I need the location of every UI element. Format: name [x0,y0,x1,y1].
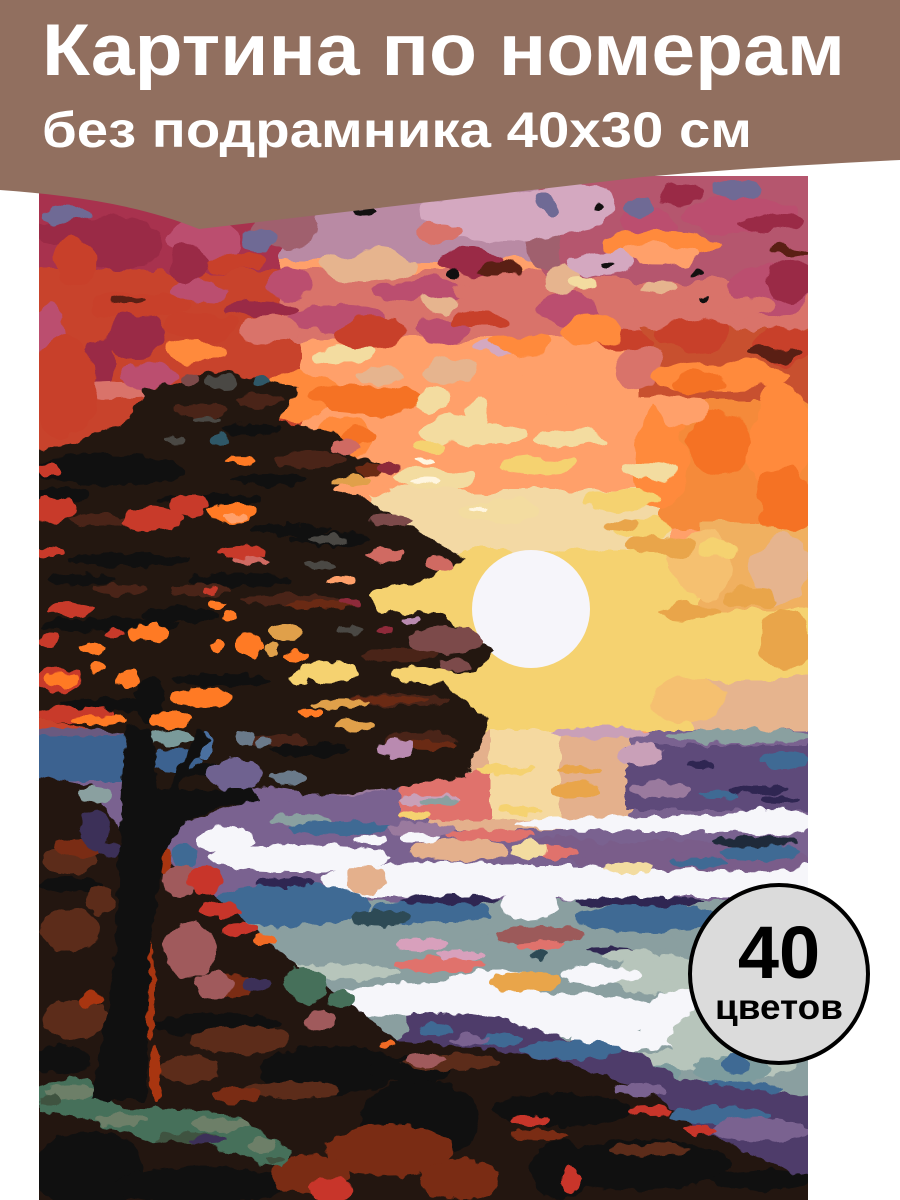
sky background and patches [39,176,808,734]
tree canopy [20,370,496,830]
sun [472,550,590,668]
tree trunk [92,725,260,1100]
cliff with rocks [39,776,808,1200]
subtitle: без подрамника 40х30 см [42,102,752,158]
badge: 40 colours: цветов [715,988,843,1027]
header banner [0,0,900,229]
title: Картина по номерам [42,10,845,91]
painting: sunset over the sea [39,176,808,1200]
badge: 40 colours: 40 [738,911,820,994]
badge: 40 colours [690,885,868,1063]
sea [39,724,808,1096]
sky gaps between the branches [137,713,300,803]
